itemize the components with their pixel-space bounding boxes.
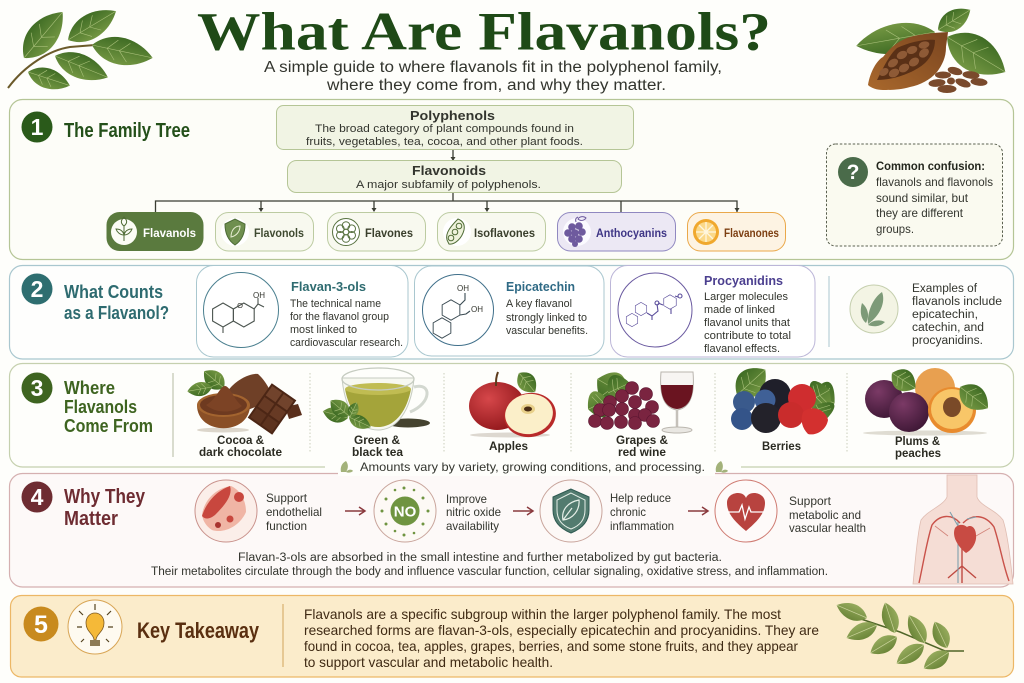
text: takeaway summary: to support vascular and metabolic health. — [304, 654, 553, 670]
icon: heart with pulse — [715, 480, 777, 542]
arrow — [513, 507, 533, 515]
label: grapes and red wine — [616, 433, 668, 459]
illustration: leaf sprig top left — [8, 1, 155, 95]
subtitle — [264, 59, 722, 94]
card: procyanidins: flavanol units that — [704, 317, 790, 329]
card: epicatechin: strongly linked to — [506, 312, 587, 324]
card: epicatechin: OH — [471, 305, 483, 314]
section number 4 — [22, 482, 52, 512]
title: What Are Flavanols? — [197, 2, 771, 62]
heading: where flavanols come from — [64, 377, 153, 436]
card: procyanidins: Larger molecules — [704, 291, 788, 303]
pill: flavonols — [216, 212, 314, 251]
pill: flavanones: Flavanones — [724, 226, 779, 240]
panel 3: where flavanols come from — [10, 359, 1014, 473]
food: grapes and red wine — [582, 365, 693, 433]
label: grapes and red wine: Grapes & — [616, 433, 668, 447]
text: support endothelial function: endothelial — [266, 505, 322, 519]
card: flavan-3-ols: most linked to — [290, 324, 357, 336]
text: help reduce chronic inflammation: chronic — [610, 505, 646, 519]
text: support endothelial function — [266, 491, 322, 533]
text: takeaway summary: researched forms are flavan-3-ols, especially epicatechin and procyanidins. They are — [304, 622, 819, 638]
arrow — [345, 507, 365, 515]
callout: common confusion: groups. — [876, 222, 914, 236]
card: flavan-3-ols: The technical name — [290, 298, 381, 310]
text: help reduce chronic inflammation: inflammation — [610, 519, 674, 533]
food: green tea — [321, 368, 430, 433]
panel 1: the family tree — [10, 100, 1014, 260]
text: examples of flavanols: flavanols include — [912, 296, 1002, 308]
card: procyanidins: made of linked — [704, 304, 775, 316]
card: procyanidins: Procyanidins — [704, 273, 783, 288]
label: cocoa and dark chocolate: dark chocolate — [199, 445, 282, 459]
card: epicatechin: vascular benefits. — [506, 325, 588, 337]
text: improve nitric oxide availability: Improve — [446, 492, 487, 506]
card: flavan-3-ols: O — [237, 301, 243, 310]
arrow — [688, 507, 708, 515]
section number 5: 5 — [34, 611, 48, 639]
heading: what counts as a flavanol: What Counts — [64, 281, 163, 302]
text: examples of flavanols: epicatechin, — [912, 309, 978, 321]
pill: flavanols — [106, 212, 204, 251]
card: flavan-3-ols: OH — [253, 291, 265, 300]
heading: where flavanols come from: Flavanols — [64, 396, 137, 417]
pill: flavones — [328, 212, 426, 251]
box: polyphenols: The broad category of plant compounds found in — [315, 123, 574, 135]
text: takeaway summary: found in cocoa, tea, apples, grapes, berries, and some stone fruits, and they appear — [304, 638, 798, 654]
panel 5: key takeaway — [10, 596, 1014, 677]
icon: blood vessel — [195, 480, 257, 542]
text: examples of flavanols: Examples of — [912, 283, 978, 295]
callout: common confusion: sound similar, but — [876, 191, 969, 205]
food: cocoa and dark chocolate — [186, 364, 302, 435]
pill: anthocyanins — [558, 212, 676, 251]
text: absorption explanation — [151, 552, 828, 578]
card: procyanidins: flavanol effects. — [704, 343, 780, 355]
pill: isoflavones — [438, 212, 546, 251]
pill: anthocyanins: Anthocyanins — [596, 226, 667, 240]
text: takeaway summary: Flavanols are a specific subgroup within the larger polyphenol family. The most — [304, 606, 781, 622]
heading: what counts as a flavanol — [64, 281, 169, 323]
callout: common confusion — [826, 144, 1002, 246]
label: green and black tea: black tea — [352, 445, 403, 459]
label: plums and peaches — [895, 434, 941, 460]
heading: what counts as a flavanol: as a Flavanol? — [64, 302, 169, 323]
text: examples of flavanols: procyanidins. — [912, 335, 983, 347]
text: improve nitric oxide availability: nitric oxide — [446, 505, 501, 519]
icon: light bulb — [68, 600, 122, 654]
label: apples: Apples — [489, 439, 528, 453]
section number 3: 3 — [31, 375, 43, 401]
heading: why they matter — [64, 485, 145, 530]
text: help reduce chronic inflammation — [610, 491, 674, 533]
card: flavan-3-ols: Flavan-3-ols — [291, 279, 366, 294]
text: examples of flavanols: catechin, and — [912, 322, 984, 334]
card: procyanidins: contribute to total — [704, 330, 791, 342]
box: flavonoids: Flavonoids — [412, 163, 486, 178]
card: epicatechin: Epicatechin — [506, 279, 575, 294]
subtitle: A simple guide to where flavanols fit in the polyphenol family, — [264, 59, 722, 76]
text: improve nitric oxide availability: availability — [446, 519, 499, 533]
illustration: human circulatory system — [913, 475, 1013, 584]
card: epicatechin: A key flavanol — [506, 298, 572, 310]
food: plums and peaches — [863, 364, 995, 436]
text: takeaway summary — [304, 606, 819, 670]
text: support metabolic and vascular health: vascular health — [789, 521, 866, 535]
text: support metabolic and vascular health: metabolic and — [789, 508, 861, 522]
icon: leaf circle — [850, 285, 898, 333]
label: plums and peaches: peaches — [895, 446, 941, 460]
card: epicatechin — [414, 266, 604, 356]
text: support endothelial function: Support — [266, 491, 308, 505]
icon: nitric oxide: NO — [394, 504, 417, 520]
panel 4: why they matter — [10, 474, 1014, 587]
callout: common confusion: ? — [847, 161, 859, 184]
pill: flavonols: Flavonols — [254, 226, 304, 240]
text: absorption explanation: Their metabolites circulate through the body and influence vascular function, cellular signaling, oxidative stress, and inflammation. — [151, 566, 828, 578]
label: green and black tea: Green & — [354, 433, 400, 447]
section number 4: 4 — [31, 484, 44, 510]
pill: isoflavones: Isoflavones — [474, 226, 535, 240]
heading: where flavanols come from: Come From — [64, 415, 153, 436]
text: support endothelial function: function — [266, 519, 307, 533]
section number 2: 2 — [31, 276, 43, 302]
heading: why they matter: Matter — [64, 507, 118, 530]
box: polyphenols: fruits, vegetables, tea, cocoa, and other plant foods. — [306, 136, 583, 148]
box: polyphenols — [276, 106, 634, 150]
box: polyphenols: Polyphenols — [410, 108, 495, 123]
label: plums and peaches: Plums & — [895, 434, 940, 448]
pill: flavanones — [688, 212, 786, 251]
heading: where flavanols come from: Where — [64, 377, 115, 398]
card: procyanidins — [610, 266, 815, 357]
text: improve nitric oxide availability — [446, 492, 501, 533]
illustration: leaf sprig bottom right — [834, 598, 964, 675]
text: absorption explanation: Flavan-3-ols are absorbed in the small intestine and further metabolized by gut bacteria. — [238, 552, 722, 564]
callout: common confusion: they are different — [876, 206, 964, 220]
box: flavonoids — [288, 160, 622, 192]
heading: the family tree: The Family Tree — [64, 120, 190, 142]
connectors — [156, 149, 740, 212]
label: cocoa and dark chocolate: Cocoa & — [217, 433, 264, 447]
food: berries — [728, 359, 841, 434]
panel 2: what counts as a flavanol — [10, 266, 1014, 359]
label: cocoa and dark chocolate — [199, 433, 282, 459]
section number 2 — [22, 274, 52, 304]
section number 1: 1 — [31, 114, 44, 140]
text: help reduce chronic inflammation: Help reduce — [610, 491, 671, 505]
callout: common confusion: flavanols and flavonols — [876, 175, 993, 189]
label: green and black tea — [352, 433, 403, 459]
box: flavonoids: A major subfamily of polyphenols. — [356, 179, 541, 191]
section number 3 — [22, 372, 52, 404]
section number 5 — [24, 606, 58, 642]
text: support metabolic and vascular health: Support — [789, 494, 832, 508]
icon: shield — [540, 480, 602, 542]
heading: why they matter: Why They — [64, 485, 145, 508]
illustration: cocoa pod and beans — [854, 1, 1015, 93]
card: flavan-3-ols — [196, 266, 408, 357]
label: grapes and red wine: red wine — [618, 445, 666, 459]
label: berries: Berries — [762, 439, 801, 453]
pill: flavones: Flavones — [365, 226, 413, 240]
section number 1 — [22, 112, 52, 142]
heading: key takeaway: Key Takeaway — [137, 618, 259, 643]
callout: common confusion: Common confusion: — [876, 159, 985, 173]
pill: flavanols: Flavanols — [143, 226, 196, 240]
card: flavan-3-ols: cardiovascular research. — [290, 337, 403, 349]
card: epicatechin: OH — [457, 284, 469, 293]
text: examples of flavanols — [912, 283, 1002, 347]
food: apples — [469, 367, 559, 441]
icon: nitric oxide — [374, 480, 436, 542]
card: flavan-3-ols: for the flavanol group — [290, 311, 389, 323]
text: support metabolic and vascular health — [789, 494, 866, 535]
note: amounts vary: Amounts vary by variety, growing conditions, and processing. — [360, 460, 705, 474]
subtitle: where they come from, and why they matter. — [326, 77, 666, 94]
